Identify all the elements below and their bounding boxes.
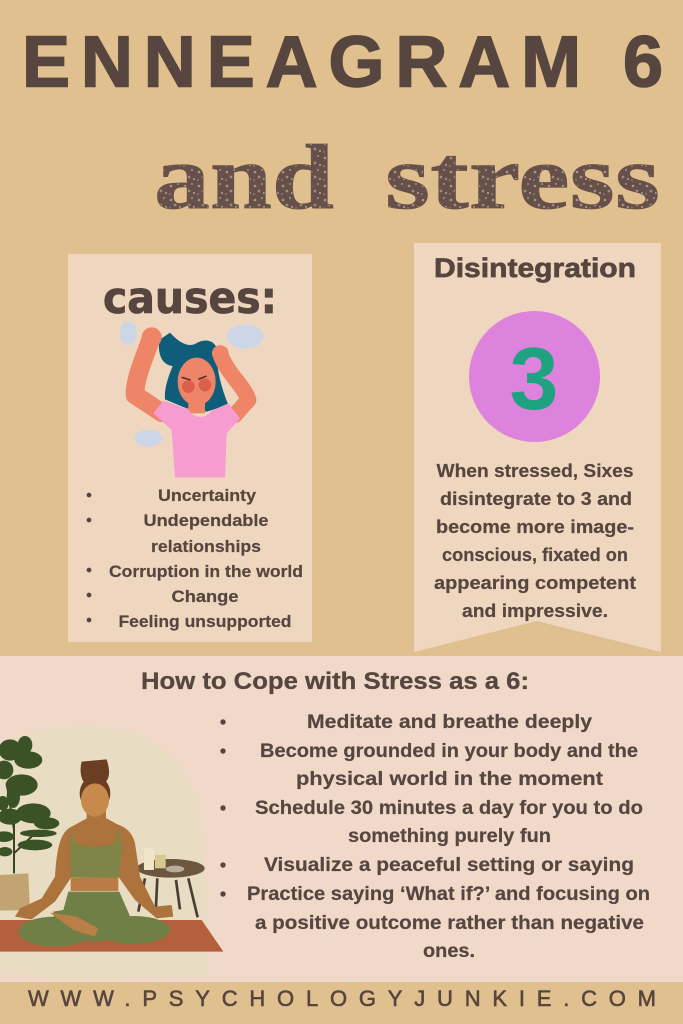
list: coping strategies: something purely fun [348, 825, 551, 847]
list: coping strategies: a positive outcome rather than negative [255, 912, 644, 934]
text: disintegration description: and impressive. [462, 601, 608, 621]
list: coping strategies: Schedule 30 minutes a day for you to do [255, 797, 643, 819]
text: disintegration description: disintegrate to 3 and [440, 489, 632, 509]
list: causes: Uncertainty [158, 487, 257, 505]
list: causes: Undependable [144, 512, 268, 530]
panel: disintegration [414, 243, 661, 652]
list: coping strategies: Meditate and breathe deeply [307, 711, 592, 733]
table [137, 848, 205, 917]
subtitle: and stress: and [154, 126, 334, 228]
illustration: meditating woman [0, 726, 223, 978]
subtitle: and stress [154, 126, 660, 228]
list: coping strategies: Visualize a peaceful setting or saying [264, 854, 634, 876]
plant [0, 736, 59, 873]
mat [0, 920, 223, 952]
list: coping strategies: Practice saying ‘What if?’ and focusing on [247, 883, 650, 905]
list: causes: Corruption in the world [109, 563, 303, 581]
heading: disintegration: Disintegration [434, 253, 636, 283]
list: coping strategies: ones. [423, 940, 475, 962]
text: disintegration description: become more image- [436, 517, 634, 537]
text: disintegration description: appearing competent [434, 573, 636, 593]
list: causes [87, 487, 303, 631]
footer: website: WWW.PSYCHOLOGYJUNKIE.COM [28, 986, 656, 1011]
list: causes: Feeling unsupported [118, 613, 292, 631]
text: disintegration description: When stressed, Sixes [436, 461, 634, 481]
list: causes: Change [172, 588, 238, 606]
list: coping strategies: Become grounded in your body and the [260, 740, 638, 762]
badge: number 3 [469, 311, 600, 442]
figure [15, 818, 173, 919]
panel: causes [68, 254, 312, 642]
heading: causes: causes: [103, 273, 277, 324]
badge: number 3: 3 [510, 329, 558, 428]
list: coping strategies [220, 711, 650, 962]
illustration: stressed woman [120, 321, 263, 477]
list: coping strategies: physical world in the moment [296, 768, 604, 790]
panel: how to cope [0, 656, 683, 982]
text: disintegration description [434, 461, 636, 621]
list: causes: relationships [151, 538, 261, 556]
text: disintegration description: conscious, fixated on [442, 545, 628, 565]
heading: how to cope: How to Cope with Stress as a 6: [141, 668, 529, 695]
subtitle: and stress: stress [385, 126, 660, 228]
title: ENNEAGRAM 6 [22, 22, 663, 102]
